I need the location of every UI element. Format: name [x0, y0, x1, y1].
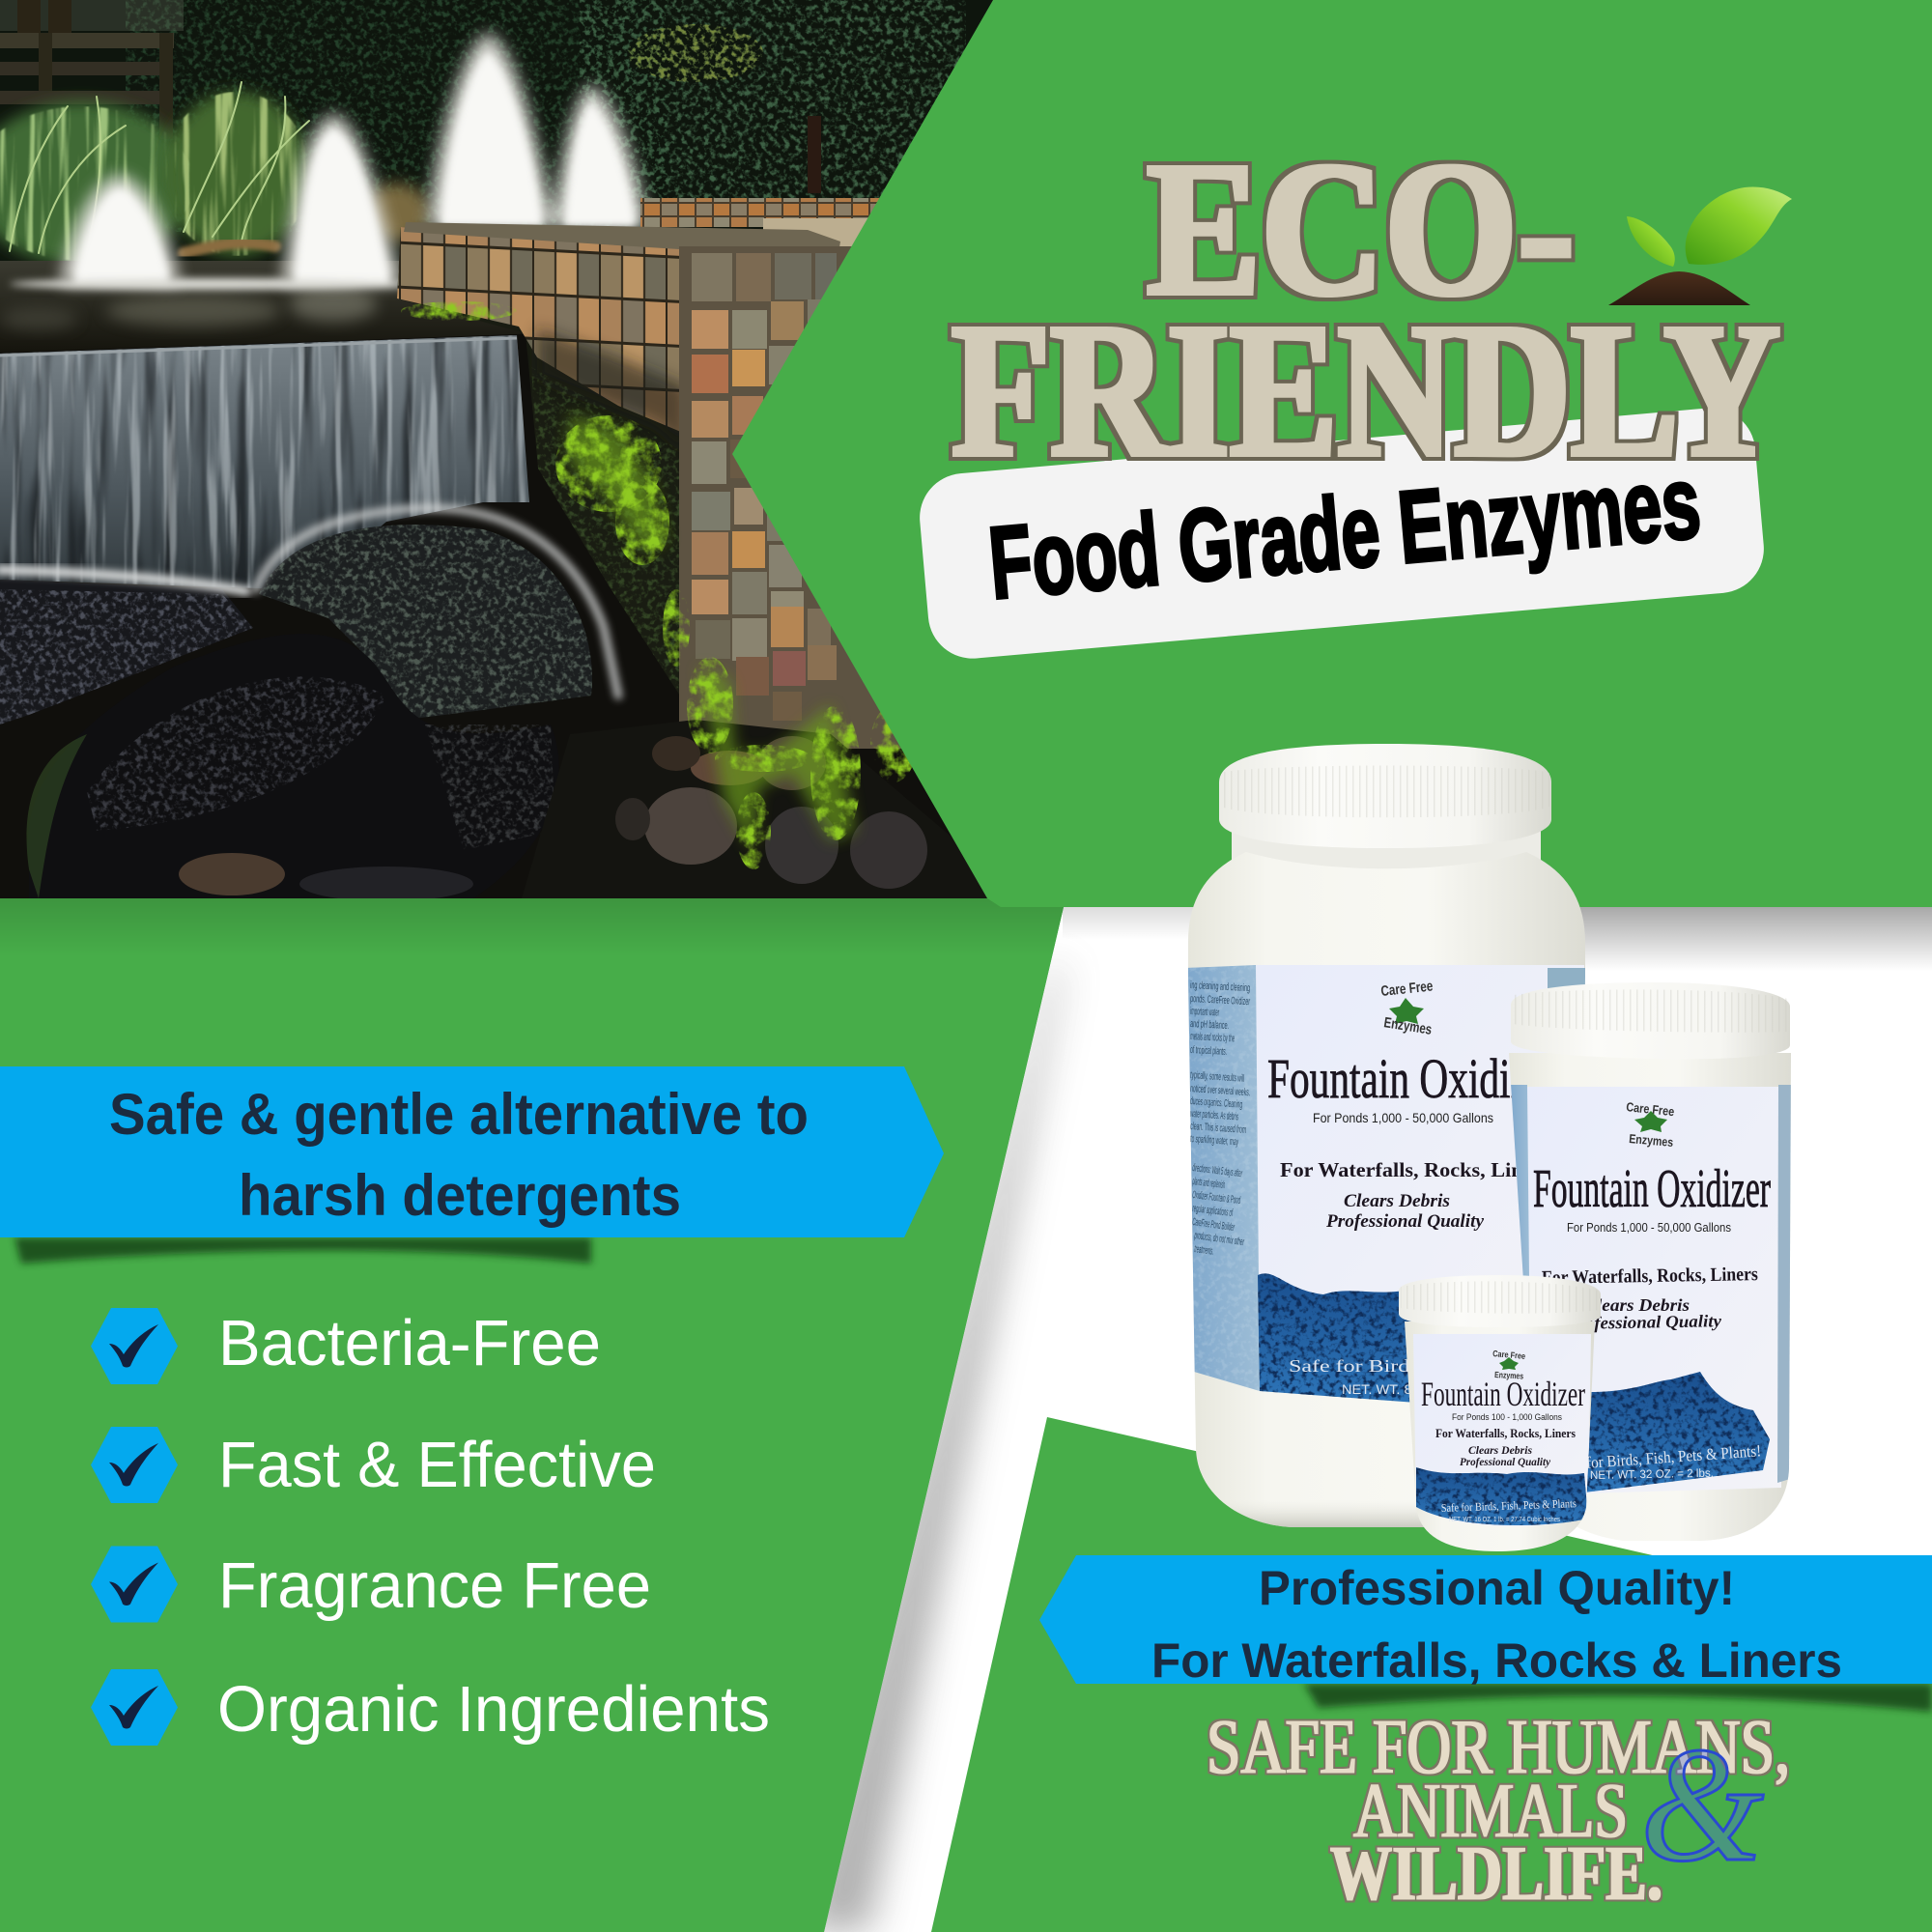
dark wet rocks [0, 525, 592, 898]
jar label text: CareFree Pond Builder [1192, 1216, 1236, 1234]
jar label text: duces organics. Cleaning [1190, 1095, 1242, 1111]
wall top and back wall [404, 198, 882, 253]
fountains [10, 33, 648, 290]
small jar text: Clears Debris [1468, 1443, 1532, 1457]
item: Fast & Effective: Fast & Effective [218, 1429, 656, 1501]
jar label [1186, 965, 1586, 1412]
jar label text [1189, 980, 1251, 1258]
brick wall end face [679, 246, 901, 749]
moss patches [401, 301, 917, 869]
waterfall curtain [0, 328, 531, 594]
jar label text: to sparkling water, may [1190, 1133, 1239, 1148]
banner heading: Safe & gentle alternative to [109, 1082, 809, 1147]
pill background [916, 405, 1768, 662]
feature checklist [91, 1307, 770, 1746]
item: Bacteria-Free: Bacteria-Free [218, 1307, 601, 1379]
medium jar text: NET. WT. 32 OZ. = 2 lbs. [1590, 1466, 1714, 1482]
jar label text: metals and rocks by the [1190, 1031, 1235, 1044]
jar title and claims [1267, 1047, 1559, 1397]
medium jar text: Safe for Birds, Fish, Pets & Plants! [1556, 1441, 1762, 1474]
jar brand logo: Care Free [1380, 978, 1434, 1000]
product: large jar: ponds. CareFree Oxidizer [1190, 993, 1251, 1008]
jar title and claims: Safe for Birds, Fish, Pets [1289, 1356, 1520, 1376]
green panel: bottom left [0, 898, 1064, 1932]
banner text: Professional Quality! [1259, 1561, 1735, 1615]
safe for humans heading: ANIMALS [1353, 1769, 1628, 1854]
wooden fence [0, 33, 174, 139]
jar brand logo [1380, 978, 1434, 1038]
food grade enzymes pill [916, 405, 1768, 662]
product: large jar: products, do not mix other [1194, 1230, 1245, 1248]
small jar text: For Ponds 100 - 1,000 Gallons [1452, 1412, 1562, 1422]
small jar text: For Waterfalls, Rocks, Liners [1435, 1426, 1576, 1440]
jar label text: regular applications of [1192, 1203, 1234, 1219]
dark tree background [0, 0, 966, 232]
green panel: bottom right [931, 1417, 1932, 1932]
left blue banner with text: harsh detergents [239, 1163, 681, 1228]
small jar text: Safe for Birds, Fish, Pets & Plants [1441, 1496, 1577, 1515]
photo: fountain waterfall and brick wall [0, 0, 1024, 901]
small jar logo [1492, 1349, 1526, 1381]
banner shadow [14, 1237, 591, 1264]
medium jar label [1509, 1085, 1793, 1493]
product: large jar: typically, some results will [1190, 1069, 1244, 1085]
ornamental grasses [0, 82, 430, 266]
green panel: top right with arrow point [732, 0, 1932, 907]
medium jar text: Professional Quality [1566, 1311, 1722, 1333]
small jar text [1421, 1375, 1585, 1523]
white slash background with shadows [802, 907, 1932, 1932]
lower stones near wall [179, 720, 927, 898]
banner arrow shape [1039, 1555, 1932, 1684]
medium jar text: For Waterfalls, Rocks, Liners [1542, 1264, 1758, 1289]
small jar body [1405, 1321, 1595, 1551]
jar lid [1219, 744, 1551, 874]
medium jar text: Clears Debris [1584, 1295, 1690, 1315]
jar title and claims: For Ponds 1,000 - 50,000 Gallons [1313, 1110, 1493, 1125]
medium jar logo: Enzymes [1629, 1131, 1674, 1150]
banner shadow [1304, 1684, 1932, 1712]
title: Eco-Friendly: ECO- [1147, 123, 1575, 336]
small jar text: Fountain Oxidizer [1421, 1375, 1585, 1413]
product: large jar: directions: Wait 5 days after [1192, 1162, 1243, 1179]
safe for humans heading [1207, 1705, 1790, 1917]
dark base [0, 334, 952, 898]
jar body [1188, 852, 1585, 1527]
small jar text: NET. WT. 16 OZ. 1 lb. = 27.74 Cubic Inches [1449, 1517, 1560, 1523]
item: Organic Ingredients: Organic Ingredients [217, 1673, 770, 1746]
medium jar text: Fountain Oxidizer [1533, 1159, 1771, 1219]
jar label text: ing cleaning and cleaning [1190, 980, 1250, 994]
item: Bacteria-Free [91, 1307, 601, 1384]
ampersand: & [1640, 1714, 1764, 1895]
safe for humans heading: SAFE FOR HUMANS, [1207, 1705, 1790, 1790]
icon: sprout in soil [1608, 187, 1792, 305]
jar label text: of tropical plants. [1190, 1044, 1227, 1058]
brick wall long face [397, 227, 679, 694]
product: large jar: clean. This is caused from [1190, 1121, 1246, 1136]
right blue banner with text: For Waterfalls, Rocks & Liners [1151, 1634, 1842, 1688]
left blue banner with text [0, 1066, 944, 1264]
small jar logo: Care Free [1492, 1349, 1526, 1361]
medium jar logo: Care Free [1626, 1099, 1675, 1119]
product: large jar: Oxidizer Fountain & Pond [1192, 1189, 1241, 1207]
product: large jar [1186, 744, 1586, 1527]
title: Eco-Friendly: FRIENDLY [952, 284, 1780, 497]
white water foam over rocks [0, 508, 618, 696]
medium jar lid [1511, 982, 1790, 1059]
jar label text: water particles. As debris [1189, 1108, 1239, 1122]
medium jar text: For Ponds 1,000 - 50,000 Gallons [1567, 1220, 1731, 1235]
jar label text: and pH balance. [1190, 1018, 1229, 1032]
medium jar body [1509, 1053, 1791, 1541]
jar title and claims: For Waterfalls, Rocks, Liners [1280, 1158, 1550, 1181]
product: large jar: noticed over several weeks. [1190, 1083, 1250, 1098]
jar label text: plants and replenish [1192, 1176, 1226, 1191]
jar title and claims: Professional Quality [1325, 1211, 1485, 1232]
jar label text: important water [1190, 1006, 1220, 1019]
jar title and claims: Fountain Oxidizer [1267, 1047, 1559, 1110]
jar title and claims: Clears Debris [1344, 1191, 1450, 1211]
banner arrow shape [0, 1066, 944, 1237]
small jar lid [1399, 1275, 1601, 1327]
medium jar logo [1626, 1099, 1675, 1150]
item: Fragrance Free: Fragrance Free [218, 1549, 651, 1622]
title: Eco-Friendly [952, 123, 1780, 497]
jar label text: treatments. [1194, 1243, 1214, 1258]
medium jar text [1533, 1159, 1771, 1482]
right blue banner with text [1039, 1555, 1932, 1712]
safe for humans heading: WILDLIFE. [1330, 1832, 1662, 1917]
pond surface [0, 261, 523, 346]
product: medium jar [1509, 982, 1793, 1541]
jar brand logo: Enzymes [1382, 1014, 1433, 1038]
small jar label [1413, 1334, 1591, 1526]
small jar logo: Enzymes [1494, 1370, 1523, 1381]
small jar text: Professional Quality [1460, 1455, 1551, 1468]
product: small jar [1399, 1275, 1601, 1551]
jar title and claims: NET. WT. 80 OZ. = 5 lbs. [1342, 1381, 1496, 1397]
